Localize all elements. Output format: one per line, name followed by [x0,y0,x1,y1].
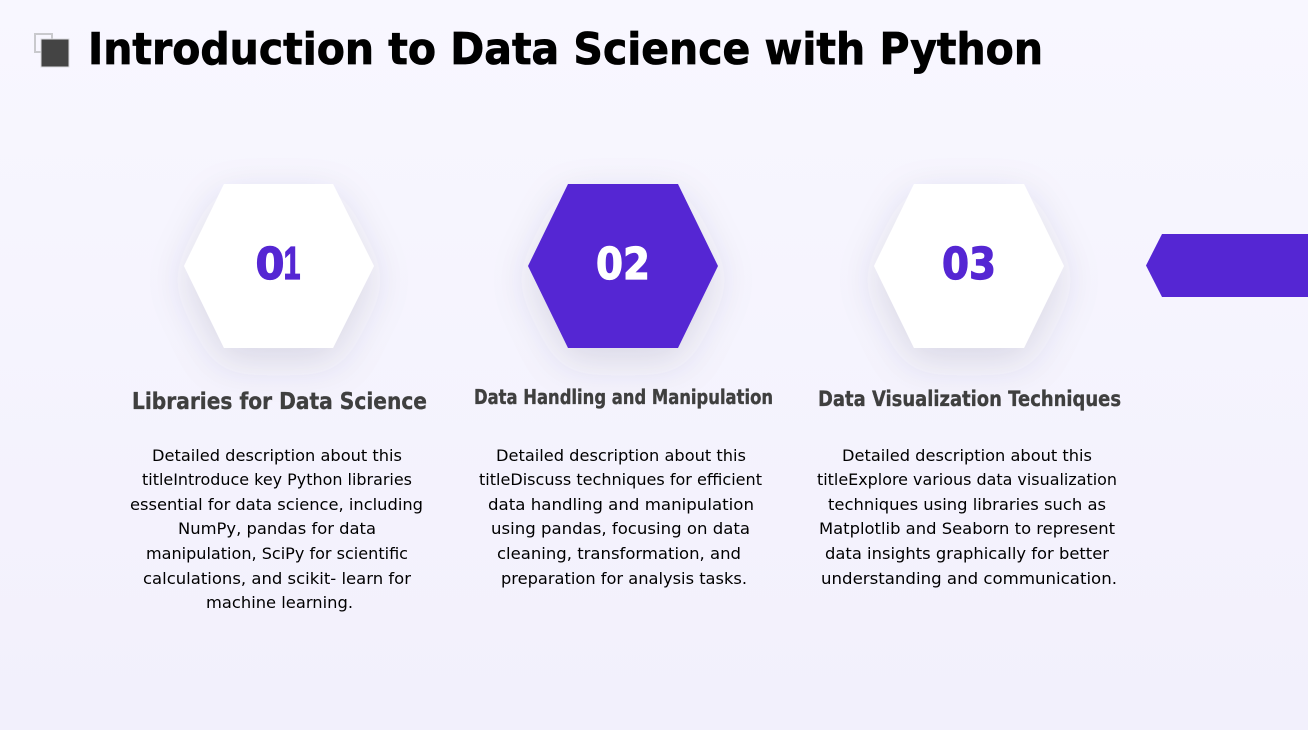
hexagon 01: 1 [284,237,300,289]
hexagon 02 [528,184,718,348]
text block: libraries description: calculations, and scikit- learn for [143,569,411,588]
text block: visualization description: data insights graphically for better [825,544,1109,563]
text block: libraries description: manipulation, SciPy for scientific [146,544,408,563]
text block: libraries description: machine learning. [206,593,353,612]
hexagon 01: 0 [256,239,284,290]
hexagon 03 [874,184,1064,348]
text block: visualization description [817,446,1117,588]
title: Introduction to Data Science with Python [88,24,1043,75]
text block: data handling description: using pandas, focusing on data [491,519,750,538]
text block: visualization description: Matplotlib and Seaborn to represent [819,519,1115,538]
heading: visualization: Data Visualization Techniques [818,387,1121,411]
text block: data handling description: Detailed description about this [496,446,746,465]
text block: visualization description: techniques using libraries such as [828,495,1106,514]
arrow ribbon [1146,234,1308,297]
hexagon 02: 02 [596,239,650,290]
text block: visualization description: understanding and communication. [821,569,1117,588]
text block: visualization description: Detailed description about this [842,446,1092,465]
heading: libraries: Libraries for Data Science [132,389,427,415]
heading: data handling: Data Handling and Manipulation [474,385,773,409]
text block: data handling description: data handling and manipulation [488,495,754,514]
hexagon 01 [184,184,374,348]
text block: libraries description: titleIntroduce key Python libraries [142,470,412,489]
text block: libraries description: Detailed description about this [152,446,402,465]
hexagon 03: 03 [942,239,996,290]
text block: data handling description [479,446,762,588]
text block: libraries description: essential for data science, including [130,495,423,514]
text block: data handling description: titleDiscuss techniques for efficient [479,470,762,489]
icon: overlapping squares [35,34,69,67]
text block: libraries description [130,446,423,612]
text block: libraries description: NumPy, pandas for data [178,519,376,538]
text block: data handling description: cleaning, transformation, and [497,544,741,563]
text block: data handling description: preparation for analysis tasks. [501,569,747,588]
text block: visualization description: titleExplore various data visualization [817,470,1117,489]
